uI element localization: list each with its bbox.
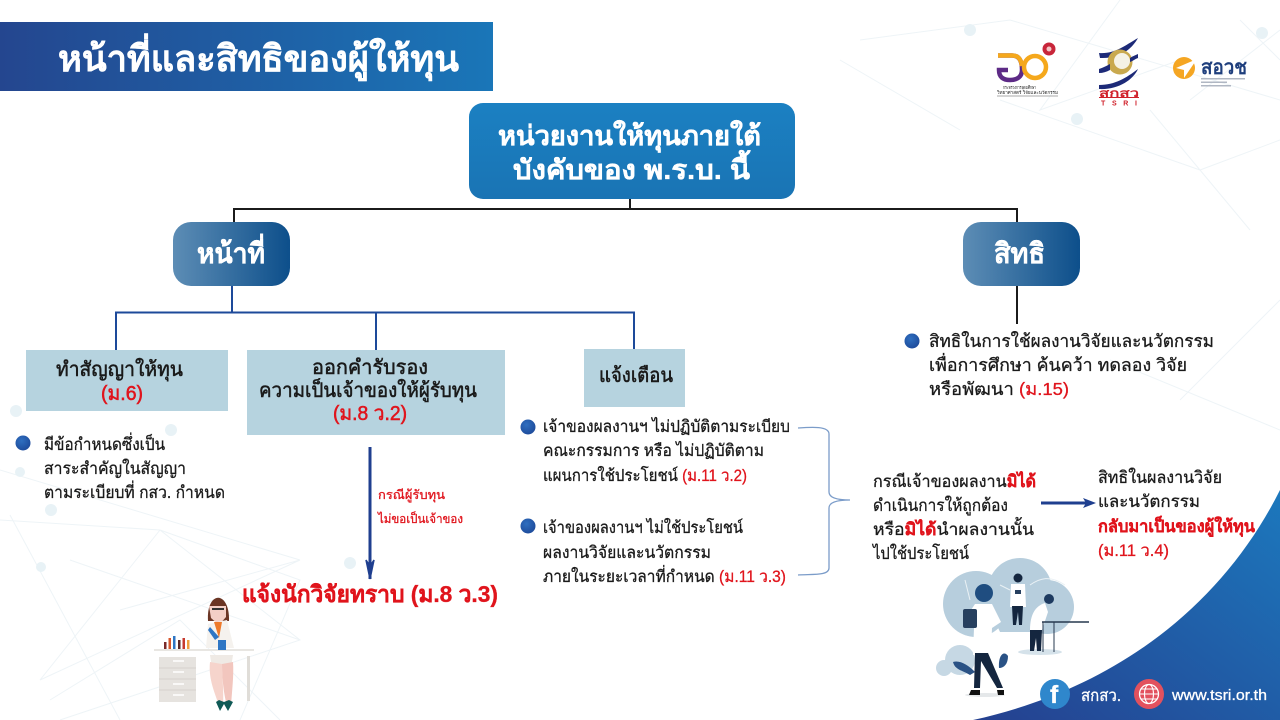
text block: consequence: ไปใช้ประโยชน์	[871, 543, 969, 563]
red condition label	[377, 488, 463, 526]
bracket joining notify bullets	[798, 427, 850, 575]
text block: consequence: กรณีเจ้าของผลงานมิได้	[873, 471, 1036, 491]
text block: result: (ม.11 ว.4)	[1098, 541, 1169, 560]
text block: notify bullet 2: ภายในระยะเวลาที่กำหนด (ม.11 ว.3)	[543, 565, 786, 586]
logo: TSRI: สกสว	[1099, 88, 1139, 100]
logo: TSRI: TSRI	[1101, 100, 1137, 108]
illustration: researcher at desk	[154, 598, 254, 711]
box: certificate: (ม.8 ว.2)	[333, 403, 407, 425]
logo: TSRI	[1099, 38, 1139, 108]
node: duties	[173, 222, 290, 286]
text block: notify bullet 2	[520, 518, 786, 586]
text block: result: และนวัตกรรม	[1098, 492, 1200, 511]
box: certificate	[247, 350, 505, 435]
arrow: certificate to notify researcher	[366, 447, 374, 579]
text block: contract bullet: มีข้อกำหนดซึ่งเป็น	[44, 432, 165, 454]
red heading: notify researcher: แจ้งนักวิจัยทราบ (ม.8 ว.3)	[242, 581, 498, 607]
org chart connector lines	[116, 196, 1017, 350]
text block: notify bullet 1: แผนการใช้ประโยชน์ (ม.11 ว.2)	[543, 466, 747, 485]
text block: consequence: ดำเนินการให้ถูกต้อง	[873, 495, 1008, 516]
text block: notify bullet 1: เจ้าของผลงานฯ ไม่ปฏิบัติตามระเบียบ	[543, 417, 790, 436]
text block: contract bullet: สาระสำคัญในสัญญา	[44, 458, 186, 478]
logo: 60 years ministry: กระทรวงการอุดมศึกษา	[1003, 85, 1036, 91]
logo: NSTDA	[1173, 57, 1247, 86]
text block: notify bullet 2: เจ้าของผลงานฯ ไม่ใช้ประโยชน์	[543, 518, 743, 537]
top node: บังคับของ พ.ร.บ. นี้	[513, 149, 751, 185]
box: grant contract: ทำสัญญาให้ทุน	[56, 358, 183, 382]
text block: result: สิทธิในผลงานวิจัย	[1098, 467, 1222, 487]
logo: NSTDA: สอวช	[1201, 57, 1247, 79]
text block: notify bullet 1	[520, 417, 790, 485]
illustration: scientists	[936, 558, 1089, 697]
blue corner swoosh	[973, 490, 1280, 720]
node: rights: สิทธิ	[994, 238, 1045, 269]
text block: notify bullet 2: ผลงานวิจัยและนวัตกรรม	[543, 544, 711, 562]
box: certificate: ออกคำรับรอง	[312, 357, 428, 379]
text block: rights bullet: สิทธิในการใช้ผลงานวิจัยและนวัตกรรม	[929, 331, 1214, 351]
text block: result	[1098, 467, 1255, 560]
box: notify: แจ้งเตือน	[599, 365, 673, 387]
top node: หน่วยงานให้ทุนภายใต้	[498, 120, 761, 153]
text block: consequence: หรือมิได้นำผลงานนั้น	[873, 517, 1034, 539]
web badge	[1134, 679, 1164, 709]
text block: contract bullet	[16, 432, 225, 502]
label: TSRI facebook: สกสว.	[1081, 687, 1121, 705]
logo: 60 years ministry	[997, 42, 1058, 96]
box: grant contract	[26, 350, 228, 411]
text block: contract bullet: ตามระเบียบที่ กสว. กำหนด	[44, 480, 225, 502]
title banner	[0, 22, 493, 91]
box: certificate: ความเป็นเจ้าของให้ผู้รับทุน	[259, 377, 477, 403]
box: notify	[584, 349, 685, 407]
label: website: www.tsri.or.th	[1171, 687, 1267, 704]
title banner: หน้าที่และสิทธิของผู้ให้ทุน	[58, 33, 459, 82]
text block: consequence	[871, 471, 1036, 563]
text block: notify bullet 1: คณะกรรมการ หรือ ไม่ปฏิบัติตาม	[543, 441, 764, 460]
text block: result: กลับมาเป็นของผู้ให้ทุน	[1098, 514, 1255, 538]
arrow: to result	[1041, 498, 1096, 508]
box: grant contract: (ม.6)	[101, 383, 143, 405]
red condition label: กรณีผู้รับทุน	[378, 488, 445, 503]
facebook badge: f	[1050, 681, 1059, 709]
red condition label: ไม่ขอเป็นเจ้าของ	[377, 511, 463, 526]
text block: rights bullet: หรือพัฒนา (ม.15)	[929, 379, 1069, 399]
node: rights	[963, 222, 1080, 286]
logo: 60 years ministry: วิทยาศาสตร์ วิจัยและนวัตกรรม	[997, 89, 1058, 95]
text block: rights bullet	[904, 331, 1214, 399]
text block: rights bullet: เพื่อการศึกษา ค้นคว้า ทดลอง วิจัย	[929, 353, 1187, 375]
facebook badge	[1040, 679, 1070, 709]
top node	[469, 103, 795, 199]
node: duties: หน้าที่	[197, 233, 265, 269]
